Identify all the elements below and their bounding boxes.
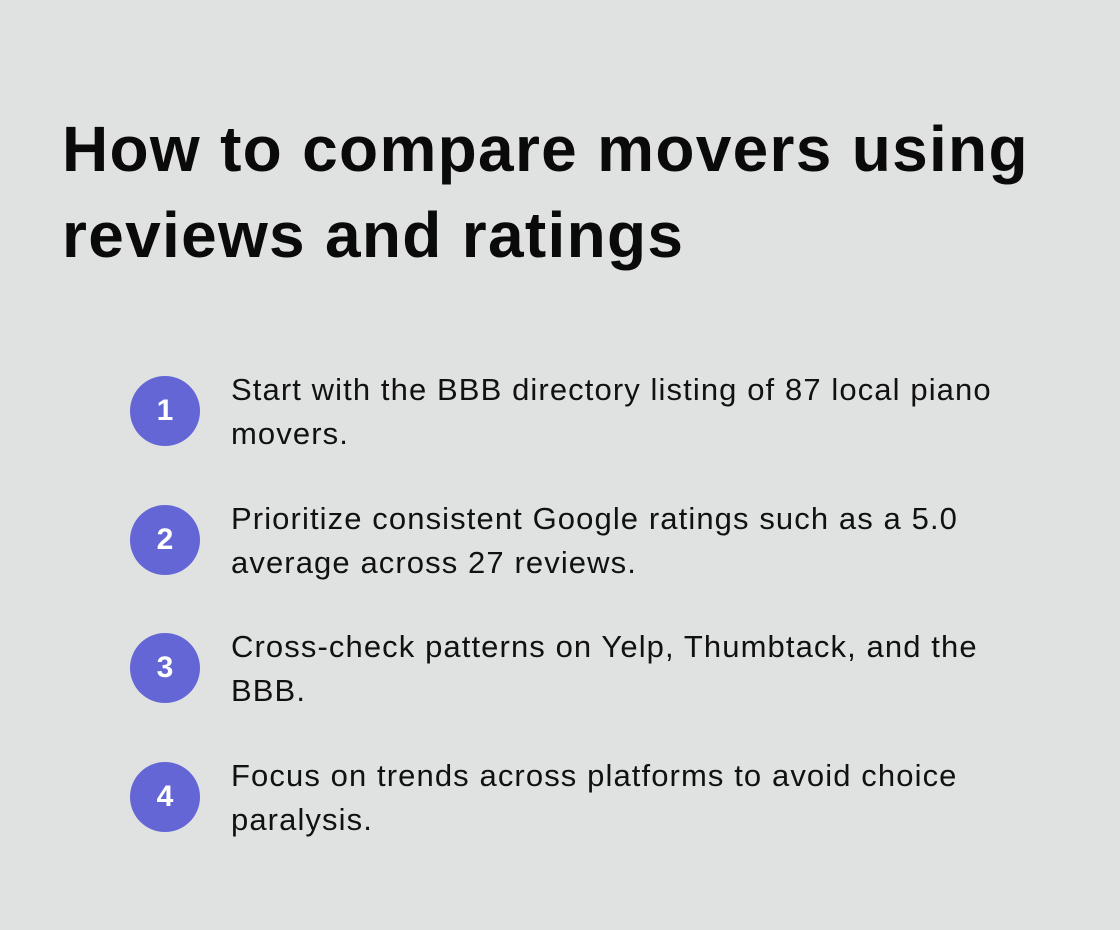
title <box>62 113 1029 271</box>
step 1 <box>130 372 992 451</box>
title: How to compare movers using <box>62 113 1029 185</box>
step 4 <box>130 758 958 837</box>
text: step 4: Focus on trends across platforms to avoid choice <box>231 758 958 793</box>
text: step 1: movers. <box>231 416 349 451</box>
text: step 2: Prioritize consistent Google ratings such as a 5.0 <box>231 501 958 536</box>
icon: number 1 <box>130 376 200 446</box>
text: step 3: Cross-check patterns on Yelp, Thumbtack, and the <box>231 629 978 664</box>
text: step 4 <box>231 758 958 837</box>
text: step 3: BBB. <box>231 673 306 708</box>
icon: number 2 <box>130 505 200 575</box>
step 2 <box>130 501 958 580</box>
text: step 2 <box>231 501 958 580</box>
icon: number 4: 4 <box>157 780 173 813</box>
text: step 2: average across 27 reviews. <box>231 545 637 580</box>
title: reviews and ratings <box>62 199 684 271</box>
step 3 <box>130 629 978 708</box>
text: step 3 <box>231 629 978 708</box>
text: step 1 <box>231 372 992 451</box>
icon: number 2: 2 <box>157 523 173 556</box>
icon: number 1: 1 <box>157 394 173 427</box>
icon: number 4 <box>130 762 200 832</box>
icon: number 3 <box>130 633 200 703</box>
text: step 4: paralysis. <box>231 802 373 837</box>
icon: number 3: 3 <box>157 651 173 684</box>
text: step 1: Start with the BBB directory listing of 87 local piano <box>231 372 992 407</box>
